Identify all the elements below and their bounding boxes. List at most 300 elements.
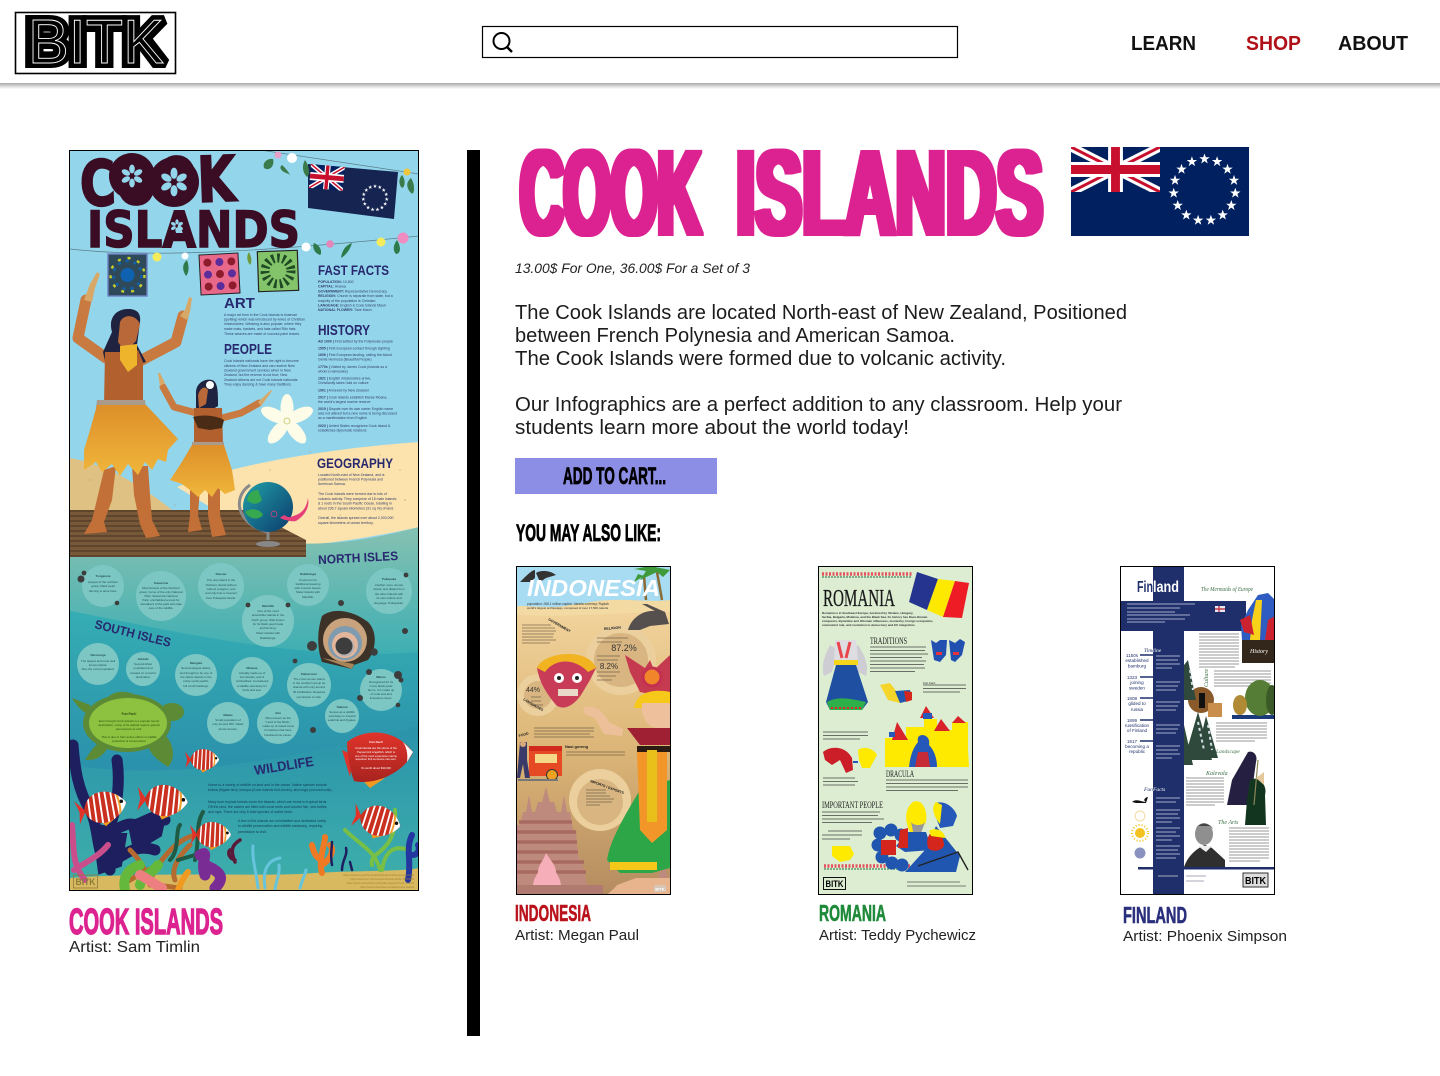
history: 1606 | First European landing, calling the island [318,353,392,357]
island circles: "Land of the Birds," [265,720,291,724]
wildlife heading and text: Off the land, the waters are filled with coral reefs and colorful fish, sea turtles, [208,805,327,809]
island circles: Park, uninhabited except for [142,598,180,602]
island circles: Tongareva [96,574,111,578]
turtle with fun fact: protection & conservation [111,739,146,743]
island circles: formations that have [264,728,292,732]
island circles: language: Pukapukan. [374,601,404,605]
bitk logo: BITK [826,879,844,889]
vertical divider [467,150,480,1036]
art section [224,295,305,336]
timeline: joining [1129,680,1144,685]
fun fact red fish: Peppermint Angelfish, which is [357,750,396,754]
history: 1595 | First European contact through sighting [318,346,390,350]
island circles: Manuae [246,666,258,670]
island circles: North group. Well known [252,618,285,622]
island circles: Small population of [215,718,241,722]
island circles: Second-Most [134,662,152,666]
small tower [652,855,668,894]
island circles: Largest of the northern [88,580,119,584]
thumbnail: Finland [1120,566,1278,894]
sandy sea floor [70,868,419,891]
island circles: accessible islands in the [252,613,285,617]
history: 2023 | United States recognizes Cook Island & [318,424,391,428]
white flower [261,394,313,444]
island circles: full of old buildings. [183,684,209,688]
timeline: 1808 [1127,696,1138,701]
island circles: Palmerston [301,672,317,676]
timeline: russification [1125,723,1150,728]
wildlife heading and text: and rays. There are only 6 total species of native birds. [208,810,293,814]
caption: Romania: ROMANIA [819,900,886,926]
search box [482,26,958,58]
logo: BITK: BITK [28,8,164,77]
timeline: 1150s [1126,653,1139,658]
title: Cook Islands: COOK [79,142,238,221]
main poster: Cook Islands [70,142,419,891]
geography: about 236.7 square kilometers (91 sq mi) of land. [318,506,394,510]
people section: Zealand citizens are not Cook Islands nationals. [224,378,298,382]
pink stupa [533,853,561,885]
island circles: limestone caves. [370,696,392,700]
fast facts: RELIGION: Church is separate from state, but a [318,294,393,298]
barong mask [537,654,596,708]
artist: Sam Timlin: Artist: Sam Timlin [69,939,200,956]
island circles: One of the most [257,609,279,613]
art section: missionaries. Weaving is also popular, where they [224,322,302,326]
people section: citizens of New Zealand and can receive New [224,364,295,368]
geography: American Samoa. [318,482,346,486]
folded textile [880,683,912,703]
nav: shop: SHOP [1246,32,1301,55]
timeline: glided to [1128,701,1146,706]
south isles heading: SOUTH ISLES [93,617,172,650]
pearl shell [78,571,408,733]
island circles: with coconut leaves. [294,586,322,590]
island circles: Manihiki [262,604,274,608]
forest [1232,680,1278,719]
island circles: Known for its [299,578,317,582]
island circles: of coral and and [370,692,392,696]
island circles: from Pukapuka Island. [206,596,236,600]
fast facts: majority of the population is Christian [318,299,375,303]
island circles: islands with only around [293,685,325,689]
garland strings [70,150,419,253]
history: as a manifestation from English [318,416,367,420]
history: AD 1000 | First settled by the Polynesian people [318,340,393,344]
island circles: seabirds and frigates. [328,718,357,722]
small dancer [158,373,272,537]
island circles: care of the wildlife. [149,606,174,610]
island circles: Nassau [216,572,226,576]
quilt: blue [108,254,147,296]
you may also like heading: YOU MAY ALSO LIKE: [516,520,661,547]
island circles: Takutea [336,705,348,709]
dracula figure [909,735,937,767]
logo: BITK: BITK [26,8,166,77]
turtle with fun fact: permissions to visit. [115,727,142,731]
island circles: sanctuary to tropical [329,714,356,718]
garland flowers and leaves [152,152,414,276]
wildlife heading and text: A few of the islands are uninhabited and dedicated solely [238,819,326,823]
subtitle: The Mermaids of Europe [1201,586,1253,593]
history: establishes diplomatic relations [318,428,367,432]
wildlife heading and text: kotora (frigate bird), kukupa (Cook Islands fruit-doves), and unga (coconut crab). [208,788,333,792]
fast facts [318,262,393,312]
thumbnail: Indonesia: BITK [655,886,665,892]
labels: FOOD [518,731,529,738]
island circles: entire south pacific, [183,679,209,683]
labels: LANGUAGES [522,697,544,712]
corals [72,745,419,890]
people section: Zealand, but the reverse is not true; New [224,373,288,377]
history: the world's largest marine reserve [318,400,370,404]
island circles: Another more remote [375,583,403,587]
dancer figure [583,655,670,894]
island circles: Rakahanga. [260,636,276,640]
art section: ART [224,295,255,312]
island circles: in the southern group as [293,681,326,685]
people section: PEOPLE [224,341,272,358]
island circles: Mangaia [190,661,202,665]
poster flag [308,164,398,219]
snowy trees [1184,660,1218,765]
description: students learn more about the world today! [515,417,909,439]
yellow dog [832,846,854,862]
footer bar [1138,867,1275,870]
birds [520,570,556,582]
wildlife heading and text [208,754,333,834]
thumbnail: Romania [818,566,972,894]
footer text [1158,876,1206,881]
timeline: of Finland [1127,728,1148,733]
timeline: 1899 [1127,718,1138,723]
island circles: 35 inhabitants. Requires [293,690,326,694]
island circles: Pukapuka [382,577,396,581]
quilt: pink [199,253,240,295]
island circles: farms. It is made up [368,688,395,692]
timeline: line [1153,648,1162,654]
island circles: Park. Suwarrow National [144,594,178,598]
traditional dress [823,640,868,710]
timeline: becoming a [1125,744,1149,749]
poster logo and sources: BITK [76,877,96,887]
nav: about: ABOUT [1338,32,1408,55]
geography: GEOGRAPHY [317,455,394,471]
artist: Megan Paul: Artist: Megan Paul [515,928,639,944]
island circles [77,563,412,744]
fast facts: LANGUAGE: English & Cook Islands Maori [318,304,386,308]
island circles: uninhabited. Considered [236,679,269,683]
people section [224,341,299,386]
fun facts [1132,787,1180,858]
wildlife heading and text: WILDLIFE [253,754,315,778]
finland title: land [1153,579,1179,596]
island circles: its own culture and [376,596,402,600]
people section: Zealand government services when in New [224,368,291,372]
fun fact red fish: Cook Islands are the Home of the [355,746,397,750]
map and history [1240,593,1275,663]
island circles: Also the most populated. [81,667,115,671]
history [318,323,397,432]
geography: & 1 reefs in the South Pacific Ocean, totalling in [318,502,392,506]
fun facts: Facts [1152,787,1165,793]
fun fact red fish: aquarium fish someone can own. [355,757,397,761]
artist: Phoenix Simpson: Artist: Phoenix Simpson [1123,929,1287,945]
poster logo and sources: https://www.cia.gov/the-world-factbook/countries/cook-islands [343,873,415,877]
people section: Cook Islands nationals have the right to become [224,359,299,363]
timeline: bamburg [1128,664,1147,668]
description: Our Infographics are a perfect addition to any classroom. Help your [515,394,1122,416]
art section: make mats, baskets, and hats called Rito hats. [224,327,296,331]
add to cart button: ADD TO CART... [563,463,666,490]
island circles: without a lagoon, and [207,587,236,591]
history: HISTORY [318,323,370,339]
island circles: and farming. [260,626,276,630]
title: Cook Islands [82,153,298,248]
fact lines [1127,604,1195,622]
island circles: Atiu [275,711,281,715]
island circles: for its black pearl trade [253,622,283,626]
art section: A major art form in the Cook Islands is tivaevae [224,313,297,317]
map and history: History [1249,649,1268,655]
island circles: Mauke [223,713,233,717]
thumbnail: Indonesia: world's largest archipelago, composed of over 17,500 islands [527,606,609,610]
sauna [1188,687,1222,717]
history: 2019 | Dispute over its own name; English name [318,407,393,411]
fast facts: FAST FACTS [318,262,389,278]
island circles: Rakahanga [300,572,316,576]
wooden deck [70,510,306,557]
portrait [1184,823,1225,867]
geography [317,455,397,525]
labels: GOVERNMENT [548,617,572,634]
island circles: Mitiaro [376,675,386,679]
timeline: republic [1129,749,1146,754]
labels: 8.2% [600,662,618,671]
geography: positioned between French Polynesia and [318,478,383,482]
thumbnail: Romania: Romania is in Southeast Europe, bordered by Ukraine, Hungary, [822,611,913,615]
thumbnail: Indonesia: population: 268.1 million capital: Jakarta currency: Rupiah [527,602,609,606]
geography: The Cook Islands were formed due to lots of [318,492,387,496]
wildlife heading and text: Many lush tropical forests cover the islands, which are home to tropical birds. [208,800,327,804]
island circles: a wildlife sanctuary for [237,684,267,688]
history: 2017 | Cook Islands establish Marae Moana, [318,396,387,400]
timeline: russia [1131,707,1144,712]
finland title: Fin [1137,579,1153,596]
island circles: Suwarrow [154,581,169,585]
geography: square kilometers of ocean territory. [318,521,374,525]
history: was not altered but a new name is being discussed [318,412,397,416]
timeline: sweden [1129,686,1145,690]
timeline [1125,648,1180,758]
island circles: Northern Island without [206,583,237,587]
geography: volcanic activity. They comprise of 15 main islands: [318,497,397,501]
product title: ISLANDS [736,124,1043,260]
island circles: dense forests. [219,727,238,731]
wildlife heading and text: permission to visit. [238,830,267,834]
sea background [70,527,419,891]
temple [517,787,603,894]
fun facts: Fun [1143,787,1153,793]
labels: IMPORTS / EXPORTS [590,779,625,795]
red dragon [823,748,877,773]
art section: (quilting) which was introduced by wives of Christian [224,318,305,322]
thumbnail: Romania: Serbia, Bulgaria, Moldova, and the Black Sea. Its history has Daco-Roman [822,615,928,619]
globe with arrow [239,482,308,547]
island circles: caretakers of the park who take [140,602,182,606]
fun fact red fish [342,733,413,788]
island circles: farming is done here. [89,589,117,593]
island circles: traditional weaving [296,582,321,586]
island circles: known island. [89,663,107,667]
island circles: currently has a crescent [205,591,237,595]
kalevala figures [1227,752,1266,825]
island circles: permission to visit. [297,695,321,699]
product title [520,124,1043,260]
island circles: and thought to be one of [180,671,212,675]
text block placeholders [522,625,628,805]
fun fact red fish: It's worth about $30,000 [361,766,391,770]
poster logo and sources: https://www.bbc.com/news/world-asia-pacific-16475585 [350,877,415,881]
landscape label: Landscape [1215,749,1240,755]
wildlife heading and text: to wildlife preservation and wildlife sanctuary, requiring [238,824,322,828]
timeline: Time [1144,648,1155,654]
island circles: Sister islands with [256,631,280,635]
thumbnail: Romania: communist rule, and revolution to democracy and EU integration. [822,623,916,627]
labels: 87.2% [611,643,637,653]
island circles: The most remote island [293,677,325,681]
history: Gente Hermosa (Beautiful People) [318,358,372,362]
fast facts: NATIONAL FLOWER: Tiare Maori [318,308,372,312]
bitk logo: BITK [1245,876,1267,887]
island circles: Sister islands with [296,590,320,594]
product title: COOK [520,124,701,260]
caption: cook islands: COOK ISLANDS [69,901,223,942]
romanian flag [909,572,969,618]
history: Christianity takes hold on culture [318,381,369,385]
island circles: Actually made up of [239,671,265,675]
turtle with fun fact: This is due to their active efforts in wildlife [101,735,157,739]
kalevala label: Kalevala [1205,771,1228,777]
turtle with fun fact: Fun Fact! [122,712,136,716]
caption: Indonesia: INDONESIA [515,900,591,926]
history: whole's namesake) [318,370,348,374]
island circles: Most famous of the Northern [142,586,180,590]
dracula heading: DRACULA [886,770,914,780]
art section: These weaves are made of coconut palm leaves. [224,332,300,336]
description: The Cook Islands are located North-east of New Zealand, Positioned [515,302,1127,324]
history: 1770s | Visited by James Cook (Islands as a [318,365,387,369]
striped fish [73,747,405,850]
culture label: Culture [1204,669,1210,687]
island circles: two islands, and is [240,675,265,679]
description: The Cook Islands were formed due to volcanic activity. [515,348,1006,370]
blue masks [931,639,965,662]
island circles: made up of raised coral [262,724,294,728]
poster logo and sources: https://www.newworldencyclopedia.org/entry/Cook_Islands [347,881,415,885]
island circles: populated and [133,666,153,670]
nav: learn: LEARN [1131,32,1196,55]
castle [885,706,969,767]
history: 1901 | Annexed by New Zealand [318,388,369,392]
geography: Located North-east of New Zealand, and is [318,473,385,477]
poster logo and sources [74,873,415,889]
island circles: Often known as the [265,716,291,720]
labels: Nasi goreng [565,744,589,749]
history: 1821 | English missionaries arrive, [318,376,371,380]
island circles: island, and distant from [373,587,405,591]
timeline: 1917 [1127,739,1138,744]
large dancer [78,272,192,538]
labels [518,617,637,795]
island circles: only around 250, 'failed' [212,722,244,726]
important people heading: IMPORTANT PEOPLE [822,800,883,810]
food cart [517,741,562,781]
important people illustration [872,801,968,872]
island circles: located on a tourist [130,671,156,675]
fast facts: GOVERNMENT: Representative Democracy [318,290,387,294]
timeline: established [1125,658,1149,663]
island circles: Recognized for its [369,680,394,684]
traditions: TRADITIONS [870,636,907,646]
island circles: the oldest islands in the [180,675,212,679]
flag: Cook Islands [1071,147,1249,236]
island circles: Manihiki. [302,595,314,599]
poster logo and sources: https://www.britannica.com/place/Cook-Islands [360,885,415,889]
romania title: ROMANIA [823,586,895,612]
thumbnail: Romania: conquests, Byzantine and Ottoman influences, monarchy, foreign occupation, [822,619,933,623]
island circles: Rarotonga [90,653,106,657]
people section: They enjoy dancing & have many traditions. [224,382,292,386]
quilt: green [257,250,299,292]
island circles: Serves as a wildlife [329,710,355,714]
labels: 44% [526,687,540,694]
add to cart button [515,458,717,494]
fun fact red fish: one of the most expensive marine [355,754,397,758]
island circles: Aitutaki [137,657,149,661]
fast facts: POPULATION: 10,600 [318,280,354,284]
island circles: group, home of the only National [139,590,183,594]
island circles: Second-largest island, [181,666,211,670]
fun fact red fish: Fun Fact! [369,740,383,744]
header bar [0,0,1440,89]
description [515,302,1127,439]
island circles: group, black pearl [91,584,115,588]
indonesia title: INDONESIA [527,575,660,601]
title: Cook Islands: ISLANDS [87,201,300,259]
turtle with fun fact [72,692,184,767]
turtle with fun fact: Even though Cook Islands is a popular tourist [99,719,159,723]
komodo dragon [628,604,669,630]
caption: Finland: FINLAND [1123,902,1187,928]
labels: RELIGION [604,625,621,631]
small flag [1215,606,1225,612]
thumbnail: Indonesia [516,566,670,894]
description: between French Polynesia and American Samoa. [515,325,955,347]
palm trees [634,566,670,600]
turtle with fun fact: destination, many of its islands require special [98,723,160,727]
island circles: fossilised into caves. [264,733,292,737]
wildlife heading and text: Home to a variety of wildlife on land and in the ocean. Native species include [208,783,327,787]
island circles: many black pearl [370,684,393,688]
fast facts: CAPITAL: Avarua [318,284,346,288]
north isles heading: NORTH ISLES [318,549,398,567]
artist: Teddy Pychewicz: Artist: Teddy Pychewicz [819,928,976,944]
island circles: The largest and most well [81,659,115,663]
right column text [1186,634,1271,861]
island circles: The only island in the [207,578,236,582]
island circles: destination [136,675,151,679]
